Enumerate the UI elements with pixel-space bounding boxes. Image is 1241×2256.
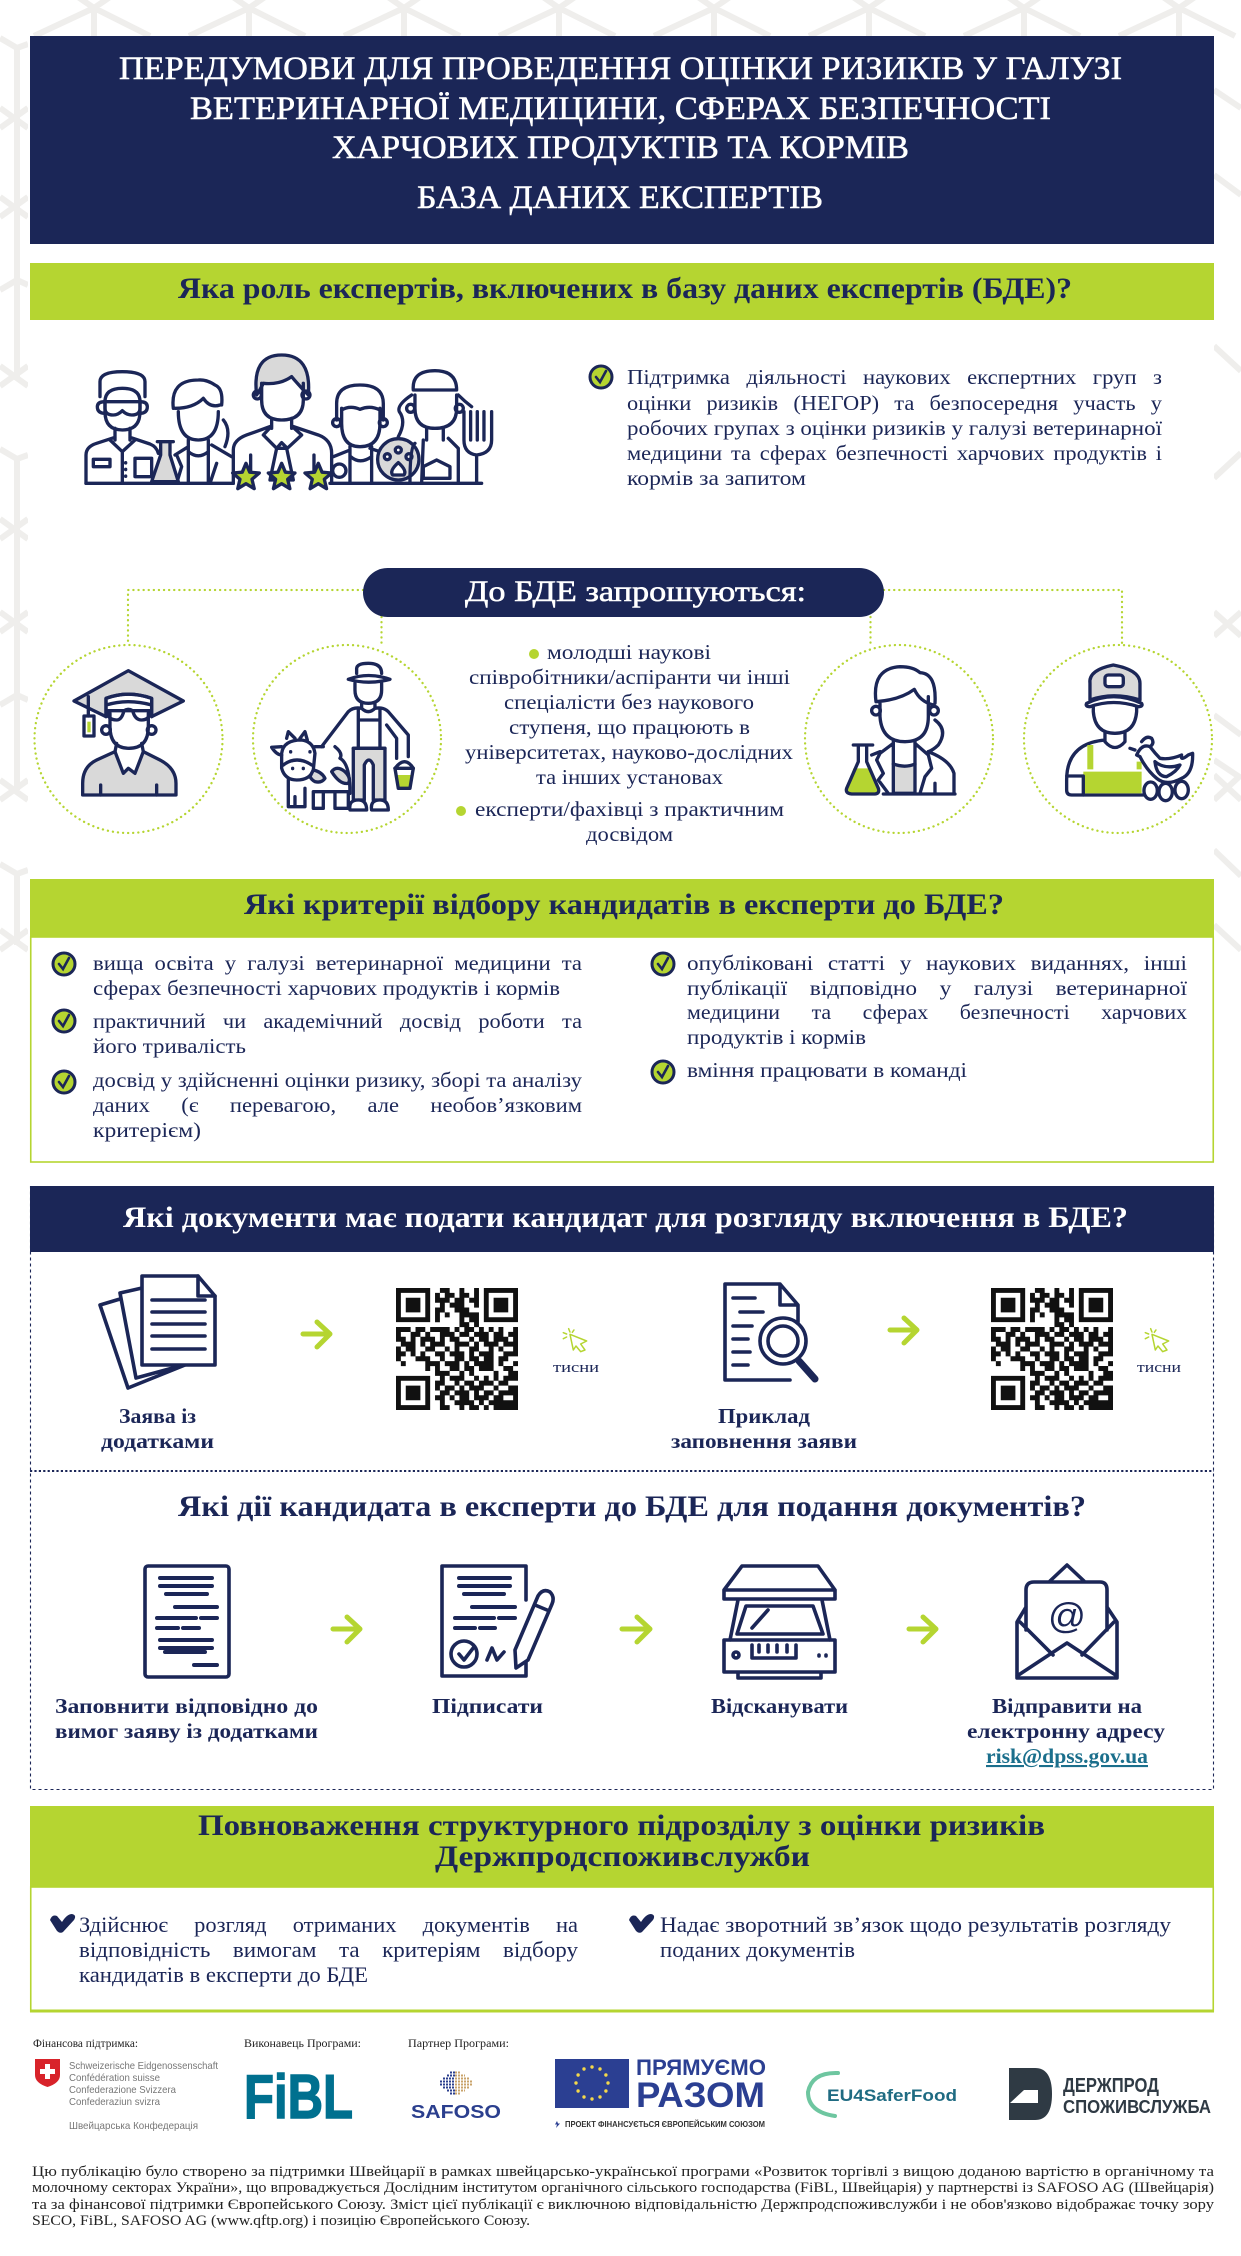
page white area (28, 36, 1214, 1036)
icon: woman scientist (846, 667, 955, 794)
divider (30, 1470, 1214, 1472)
header banner (30, 36, 1214, 244)
logo labels: Виконавець Програми: (244, 2038, 361, 2050)
text block: expert role (590, 365, 1163, 490)
icon: click cursor 1 (563, 1329, 587, 1352)
panel: criteria list: опубліковані статті у наукових виданнях, інші (687, 951, 1187, 975)
text block: expert role: оцінки ризиків (НЕГОР) та безпосередня участь у (627, 391, 1163, 415)
text block: expert role: медицини та сферах безпечності харчових продуктів і (627, 441, 1162, 465)
dotted circle 3 (805, 645, 993, 833)
label: application: Заява із (119, 1404, 196, 1428)
arrow (303, 1322, 330, 1347)
background lattice pattern (0, 0, 1241, 950)
label: send: електронну адресу (967, 1719, 1166, 1743)
logo: Derzhprodspozhyvsluzhba (1009, 2068, 1211, 2120)
text block: expert role: кормів за запитом (627, 466, 806, 490)
footer disclaimer (32, 2164, 1215, 2229)
section heading: documents (30, 1186, 1214, 1252)
connector dotted lines (128, 590, 1122, 645)
icon: checkmark 1 (50, 1914, 75, 1933)
logo: EU flag and Pryamuyemo Razom: ПРЯМУЄМО (636, 2055, 766, 2080)
text block: who is invited: спеціалісти без наукового (504, 690, 754, 714)
footer disclaimer: та за фінансової підтримки Європейського Союзу. Зміст цієї публікації є виключною відповідальністю Держпродспоживслужби і не обов'язково відображає точку зору (32, 2197, 1215, 2213)
logo: Swiss Confederation: Confederaziun svizra (69, 2096, 160, 2108)
logo: EU flag and Pryamuyemo Razom (555, 2055, 766, 2129)
text block: expert role: робочих групах з оцінки ризиків у галузі ветеринарної (627, 416, 1162, 440)
logo: EU flag and Pryamuyemo Razom: РАЗОМ (636, 2076, 765, 2115)
panel: criteria list: вища освіта у галузі ветеринарної медицини та (93, 951, 583, 975)
text block: who is invited: досвідом (586, 822, 673, 846)
logo: Swiss Confederation: Confédération suisse (69, 2072, 160, 2084)
arrow (909, 1617, 936, 1642)
icon: group of experts with stars (86, 355, 492, 489)
icon: email envelope (1017, 1565, 1117, 1678)
icon: farmer with cow (272, 663, 413, 810)
text block: who is invited: співробітники/аспіранти чи інші (469, 665, 790, 689)
click label 1: тисни (553, 1360, 599, 1376)
QR code 1 (396, 1288, 518, 1410)
logo labels: Партнер Програми: (408, 2038, 509, 2050)
header banner: БАЗА ДАНИХ ЕКСПЕРТІВ (417, 180, 823, 216)
label: send (967, 1694, 1166, 1768)
header banner: ПЕРЕДУМОВИ ДЛЯ ПРОВЕДЕННЯ ОЦІНКИ РИЗИКІВ У ГАЛУЗІ (119, 51, 1122, 87)
icon: scanner (724, 1566, 835, 1678)
logo: Derzhprodspozhyvsluzhba: СПОЖИВСЛУЖБА (1063, 2097, 1211, 2117)
logo: Swiss Confederation: Швейцарська Конфедерація (69, 2120, 198, 2132)
logo: EU4SaferFood (808, 2073, 957, 2116)
icon: document with magnifier (725, 1284, 815, 1380)
icon: form (145, 1566, 229, 1677)
logo: Derzhprodspozhyvsluzhba: ДЕРЖПРОД (1063, 2075, 1159, 2097)
text block: who is invited: та інших установах (536, 765, 724, 789)
section heading: unit powers (30, 1806, 1214, 1887)
icon: checkmark 2 (629, 1914, 654, 1933)
logo: EU4SaferFood: EU4SaferFood (827, 2086, 957, 2105)
logo: SAFOSO: SAFOSO (411, 2102, 501, 2122)
logo: Swiss Confederation (35, 2059, 218, 2132)
icon: check (590, 366, 612, 388)
heading: candidate actions: Які дії кандидата в експерти до БДЕ для подання документів? (178, 1490, 1086, 1523)
panel: criteria list: практичний чи академічний досвід роботи та (93, 1009, 583, 1033)
bullet (529, 649, 539, 659)
panel: criteria list: продуктів і кормів (687, 1025, 866, 1049)
dotted circle 2 (253, 645, 441, 833)
logo: Swiss Confederation: Schweizerische Eidgenossenschaft (69, 2060, 218, 2072)
panel: unit powers: Здійснює розгляд отриманих документів на (79, 1912, 578, 1937)
panel: criteria list (31, 937, 1213, 1162)
footer disclaimer: молочному секторах України», що впроваджується Дослідним інститутом органічного сільського господарства (FiBL, Швейцарія) у партнерстві із SAFOSO AG (Швейцарія) (32, 2180, 1214, 2196)
arrow (622, 1617, 650, 1642)
footer disclaimer: SECO, FiBL, SAFOSO AG (www.qftp.org) і позицію Європейського Союзу. (32, 2213, 530, 2229)
section heading: role of experts (30, 263, 1214, 320)
logo: FiBL: FiBL (244, 2063, 353, 2132)
label: send: risk@dpss.gov.ua (986, 1744, 1149, 1768)
panel: criteria list: критерієм) (93, 1118, 201, 1142)
arrow (333, 1617, 360, 1642)
header banner: ХАРЧОВИХ ПРОДУКТІВ ТА КОРМІВ (332, 130, 909, 166)
icon: click cursor 2 (1145, 1329, 1169, 1352)
section heading: selection criteria (30, 879, 1214, 937)
label: application: додатками (101, 1429, 214, 1453)
label: sample (671, 1404, 857, 1453)
label: sample: заповнення заяви (671, 1429, 857, 1453)
pill heading: invited (363, 568, 884, 617)
logo labels: Фінансова підтримка: (33, 2038, 138, 2050)
logo: Swiss Confederation: Confederazione Svizzera (69, 2084, 176, 2096)
section heading: documents: Які документи має подати кандидат для розгляду включення в БДЕ? (123, 1201, 1128, 1234)
logos (33, 2038, 1211, 2132)
label: scan: Відсканувати (711, 1694, 848, 1718)
logo: EU flag and Pryamuyemo Razom: ПРОЕКТ ФІНАНСУЄТЬСЯ ЄВРОПЕЙСЬКИМ СОЮЗОМ (565, 2118, 765, 2129)
icon: signed form (442, 1566, 553, 1676)
icon: check (652, 1061, 674, 1083)
panel: criteria list: медицини та сферах безпечності харчових (687, 1000, 1188, 1024)
footer disclaimer: Цю публікацію було створено за підтримки Швейцарії в рамках швейцарсько-української програми «Розвиток торгівлі з вищою доданою вартістю в органічному та (32, 2164, 1214, 2180)
label: sign: Підписати (432, 1694, 543, 1718)
panel: unit powers: кандидатів в експерти до БДЕ (79, 1962, 368, 1987)
icon: check (53, 1071, 75, 1093)
panel: unit powers: відповідність вимогам та критеріям відбору (79, 1937, 578, 1962)
icon: check (53, 953, 75, 975)
pill heading: invited: До БДЕ запрошуються: (465, 575, 806, 608)
dotted frame: documents and actions (30, 1186, 1214, 1790)
header banner: ВЕТЕРИНАРНОЇ МЕДИЦИНИ, СФЕРАХ БЕЗПЕЧНОСТІ (190, 91, 1051, 127)
arrow (890, 1318, 917, 1343)
panel: criteria list: його тривалість (93, 1034, 246, 1058)
panel: criteria list: вміння працювати в команді (687, 1058, 967, 1082)
label: fill out (55, 1694, 318, 1743)
dotted circle 1 (34, 645, 222, 833)
icon: farmer with chicken (1067, 665, 1193, 801)
panel: criteria list: публікації відповідно у галузі ветеринарної (687, 976, 1187, 1000)
label: sample: Приклад (718, 1404, 810, 1428)
text block: who is invited: університетах, науково-дослідних (465, 740, 794, 764)
bullet (456, 806, 466, 816)
label: fill out: Заповнити відповідно до (55, 1694, 318, 1718)
panel: criteria list: сферах безпечності харчових продуктів і кормів (93, 976, 560, 1000)
section heading: selection criteria: Які критерії відбору кандидатів в експерти до БДЕ? (244, 888, 1004, 921)
icon: check (652, 953, 674, 975)
action labels (55, 1694, 1166, 1768)
icon: email envelope: @ (1048, 1595, 1086, 1636)
logo labels (33, 2038, 509, 2050)
section heading: unit powers: Повноваження структурного підрозділу з оцінки ризиків (198, 1809, 1045, 1842)
section heading: unit powers: Держпродспоживслужби (435, 1840, 810, 1873)
logo: SAFOSO (411, 2072, 501, 2122)
panel: criteria list: досвід у здійсненні оцінки ризику, зборі та аналізу (93, 1068, 583, 1092)
section heading: role of experts: Яка роль експертів, включених в базу даних експертів (БДЕ)? (178, 272, 1072, 305)
icon: stack of documents (100, 1276, 215, 1388)
label: fill out: вимог заяву із додатками (55, 1719, 318, 1743)
text block: who is invited: молодші наукові (547, 640, 711, 664)
panel: unit powers: поданих документів (660, 1937, 855, 1962)
icon: check (53, 1010, 75, 1032)
panel: unit powers: Надає зворотний зв’язок щодо результатів розгляду (660, 1912, 1171, 1937)
text block: who is invited: експерти/фахівці з практичним (475, 797, 784, 821)
click label 2: тисни (1137, 1360, 1181, 1376)
icon: graduate (74, 671, 183, 795)
QR code 2 (991, 1288, 1113, 1410)
text block: expert role: Підтримка діяльності наукових експертних груп з (627, 365, 1162, 389)
dotted circle 4 (1024, 645, 1212, 833)
panel: unit powers (30, 1887, 1214, 2011)
label: send: Відправити на (992, 1694, 1143, 1718)
text block: who is invited: ступеня, що працюють в (509, 715, 750, 739)
panel: criteria list: даних (є перевагою, але необов’язковим (93, 1093, 582, 1117)
text block: who is invited (456, 640, 794, 846)
label: application (101, 1404, 214, 1453)
